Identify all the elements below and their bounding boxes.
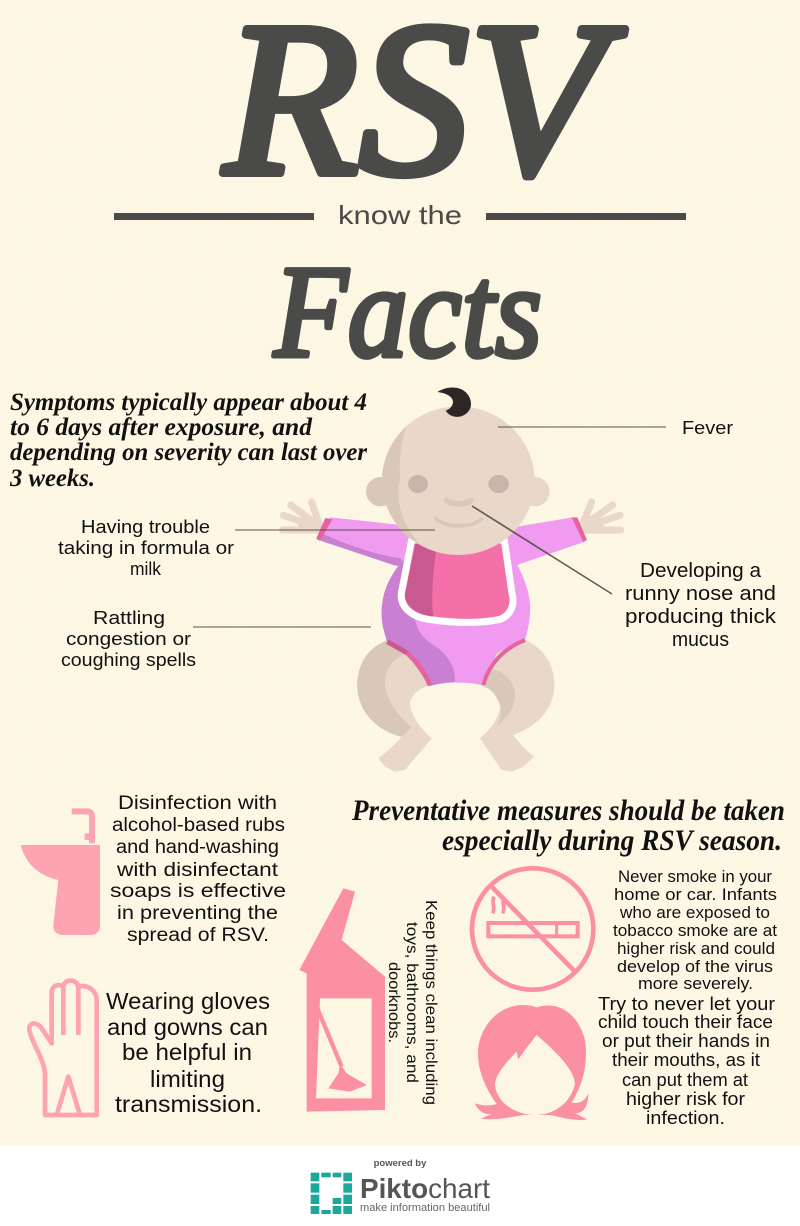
- logo mark: [311, 1173, 352, 1214]
- bodysuit: [382, 537, 530, 686]
- subtitle: know the, with side bars: [114, 200, 686, 230]
- rotated text: keep things clean: toys, bathrooms, and: [403, 922, 420, 1083]
- label: runny nose: Developing a: [640, 560, 762, 582]
- label: trouble feeding: Having trouble: [81, 517, 210, 537]
- text block: never smoke: more severely.: [638, 974, 753, 993]
- text block: symptom timing: to 6 days after exposure, and: [10, 414, 313, 441]
- right arm: [497, 517, 587, 570]
- rotated text: keep things clean: [385, 900, 439, 1105]
- text block: touching face: child touch their face: [598, 1012, 773, 1032]
- icon: child head with hair: [475, 1005, 588, 1120]
- text block: symptom timing: Symptoms typically appear about 4: [10, 389, 367, 416]
- left hand: [283, 502, 321, 532]
- text block: never smoke: develop of the virus: [617, 957, 773, 976]
- footer: powered by Piktochart: powered by: [374, 1158, 427, 1169]
- text block: symptom timing: 3 weeks.: [9, 465, 95, 492]
- text block: never smoke: higher risk and could: [617, 939, 775, 958]
- text block: disinfection: and hand-washing: [116, 837, 279, 858]
- text block: never smoke: who are exposed to: [619, 903, 770, 922]
- label: runny nose: [625, 560, 777, 651]
- text block: touching face: infection.: [646, 1108, 725, 1128]
- label: congestion: [61, 608, 196, 670]
- label: congestion: Rattling: [93, 608, 165, 628]
- label: runny nose: runny nose and: [625, 583, 776, 605]
- footer: powered by Piktochart: make information beautiful: [360, 1202, 490, 1214]
- text block: gloves and gowns: and gowns can: [107, 1014, 268, 1040]
- text block: touching face: higher risk for: [626, 1089, 745, 1109]
- text block: gloves and gowns: [106, 988, 270, 1117]
- text block: disinfection: [110, 793, 286, 946]
- text block: never smoke: Never smoke in your: [618, 867, 772, 886]
- text block: symptom timing: depending on severity can last over: [10, 439, 367, 466]
- text block: disinfection: spread of RSV.: [127, 925, 269, 946]
- text block: disinfection: alcohol-based rubs: [112, 815, 285, 836]
- left arm: [316, 517, 417, 570]
- text block: disinfection: soaps is effective: [110, 881, 286, 902]
- text block: touching face: [598, 994, 775, 1128]
- label: trouble feeding: taking in formula or: [58, 538, 234, 558]
- label: runny nose: producing thick: [625, 606, 777, 628]
- label: trouble feeding: milk: [130, 559, 162, 579]
- icon: no smoking: [472, 868, 593, 990]
- illustration: baby: [283, 387, 621, 772]
- title: Facts: Facts: [273, 238, 542, 385]
- text block: gloves and gowns: be helpful in: [122, 1039, 252, 1065]
- text block: gloves and gowns: limiting: [150, 1066, 225, 1092]
- text block: touching face: can put them at: [622, 1070, 748, 1090]
- footer: powered by Piktochart: [311, 1158, 490, 1214]
- text block: touching face: their mouths, as it: [612, 1050, 760, 1070]
- rotated text: keep things clean: doorknobs.: [385, 962, 402, 1043]
- leader line: runny nose: [472, 506, 612, 594]
- label: trouble feeding: [58, 517, 234, 579]
- rotated text: keep things clean: Keep things clean including: [422, 900, 439, 1105]
- icon: glove: [29, 981, 97, 1115]
- text block: gloves and gowns: transmission.: [115, 1091, 262, 1117]
- text block: disinfection: with disinfectant: [116, 860, 279, 881]
- label: runny nose: mucus: [672, 629, 729, 651]
- text block: gloves and gowns: Wearing gloves: [106, 988, 270, 1014]
- subtitle: know the, with side bars: know the: [338, 200, 462, 230]
- text block: touching face: Try to never let your: [598, 994, 775, 1014]
- text block: touching face: or put their hands in: [602, 1031, 770, 1051]
- bib: [401, 540, 513, 622]
- text block: never smoke: [613, 867, 777, 993]
- label: congestion: coughing spells: [61, 650, 196, 670]
- text block: never smoke: home or car. Infants: [614, 885, 777, 904]
- heading: preventative measures: [351, 794, 785, 857]
- leader lines: [193, 427, 666, 627]
- hair curl: [437, 387, 471, 417]
- legs: [357, 640, 554, 772]
- label: congestion: congestion or: [66, 629, 191, 649]
- right hand: [581, 502, 621, 532]
- head: [366, 406, 550, 557]
- text block: symptom timing: [9, 389, 367, 492]
- text block: disinfection: in preventing the: [117, 903, 278, 924]
- icon: cleaning bottle with mop: [299, 888, 385, 1112]
- icon: sink: [21, 811, 100, 935]
- text block: disinfection: Disinfection with: [118, 793, 277, 814]
- text block: never smoke: tobacco smoke are at: [613, 921, 777, 940]
- label: fever: Fever: [682, 418, 733, 438]
- footer: powered by Piktochart: Piktochart: [360, 1173, 490, 1204]
